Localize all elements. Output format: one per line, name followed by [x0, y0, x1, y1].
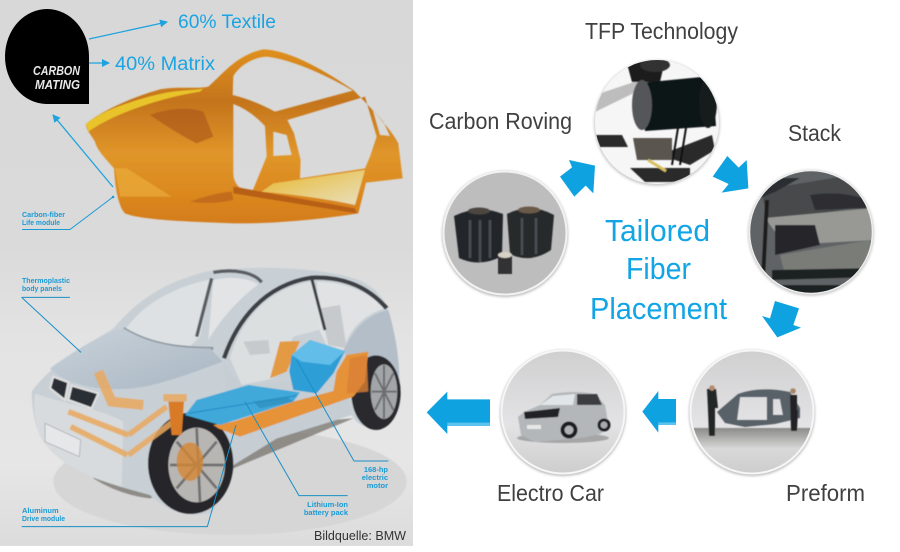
arrow: preform to car	[642, 391, 676, 433]
process cycle	[427, 18, 875, 506]
car labels: 168-hp	[364, 465, 388, 474]
blue battery pack	[185, 385, 300, 425]
heading: TFP Technology: TFP Technology	[585, 18, 738, 44]
carbon mating drop logo: MATING	[35, 77, 80, 92]
front fascia	[34, 393, 123, 487]
circle: carbon stack	[748, 170, 875, 296]
arrow: car output	[427, 392, 490, 434]
label: 60% Textile: 60% Textile	[178, 12, 276, 33]
circle: TFP machine	[594, 58, 720, 186]
door lower panel	[223, 352, 352, 465]
arrow: stack to preform	[762, 301, 801, 337]
arrow to 40% matrix	[89, 62, 109, 64]
car labels: Thermoplastic	[22, 276, 70, 285]
carbon mating drop logo: CARBON	[33, 63, 80, 78]
center title: Tailored Fiber Placement: Placement	[590, 291, 727, 326]
heading: Preform: Preform	[786, 480, 865, 506]
circle: carbon roving spools	[442, 171, 568, 297]
car labels: Drive module	[22, 514, 65, 523]
car labels: Lithium-Ion	[307, 500, 348, 509]
car labels: battery pack	[304, 508, 349, 517]
heading: Carbon Roving: Carbon Roving	[429, 108, 572, 134]
rear wheel	[351, 355, 401, 430]
car callout lines	[22, 297, 388, 527]
car body shell	[32, 268, 401, 515]
car labels: motor	[367, 481, 388, 490]
blue electric motor	[289, 340, 345, 393]
callout: Carbon-fiber Life module: Life module	[22, 218, 60, 227]
car cutaway illustration	[22, 268, 407, 535]
heading: Stack: Stack	[788, 120, 841, 146]
center title: Tailored Fiber Placement	[590, 213, 727, 326]
arrow to 60% textile	[89, 22, 167, 39]
carbon mating drop logo	[5, 9, 89, 104]
front wheel	[148, 413, 233, 514]
orange carbon-fiber life module	[86, 49, 403, 223]
callout: Carbon-fiber Life module: Carbon-fiber	[22, 210, 65, 219]
car labels: body panels	[22, 284, 62, 293]
car labels: electric	[362, 473, 388, 482]
circle: preform with two people	[689, 350, 815, 476]
circle: electric car	[500, 350, 626, 476]
roof and door frames	[197, 271, 262, 337]
center title: Tailored Fiber Placement: Tailored	[605, 213, 710, 248]
arrow: roving to TFP	[560, 160, 595, 197]
label: 40% Matrix: 40% Matrix	[115, 54, 216, 75]
hood	[50, 328, 223, 389]
orange drive module	[213, 352, 368, 437]
arrow from module to logo	[53, 115, 113, 187]
heading: Electro Car: Electro Car	[497, 480, 604, 506]
car labels	[22, 276, 388, 523]
callout: Carbon-fiber Life module	[22, 196, 114, 230]
panel: BMW i3 carbon module and car	[0, 0, 413, 546]
arrow: TFP to stack	[713, 156, 748, 193]
center title: Tailored Fiber Placement: Fiber	[626, 251, 691, 286]
ground shadow	[53, 428, 407, 535]
car labels: Aluminum	[22, 506, 59, 515]
image credit: Bildquelle: BMW	[314, 528, 407, 543]
